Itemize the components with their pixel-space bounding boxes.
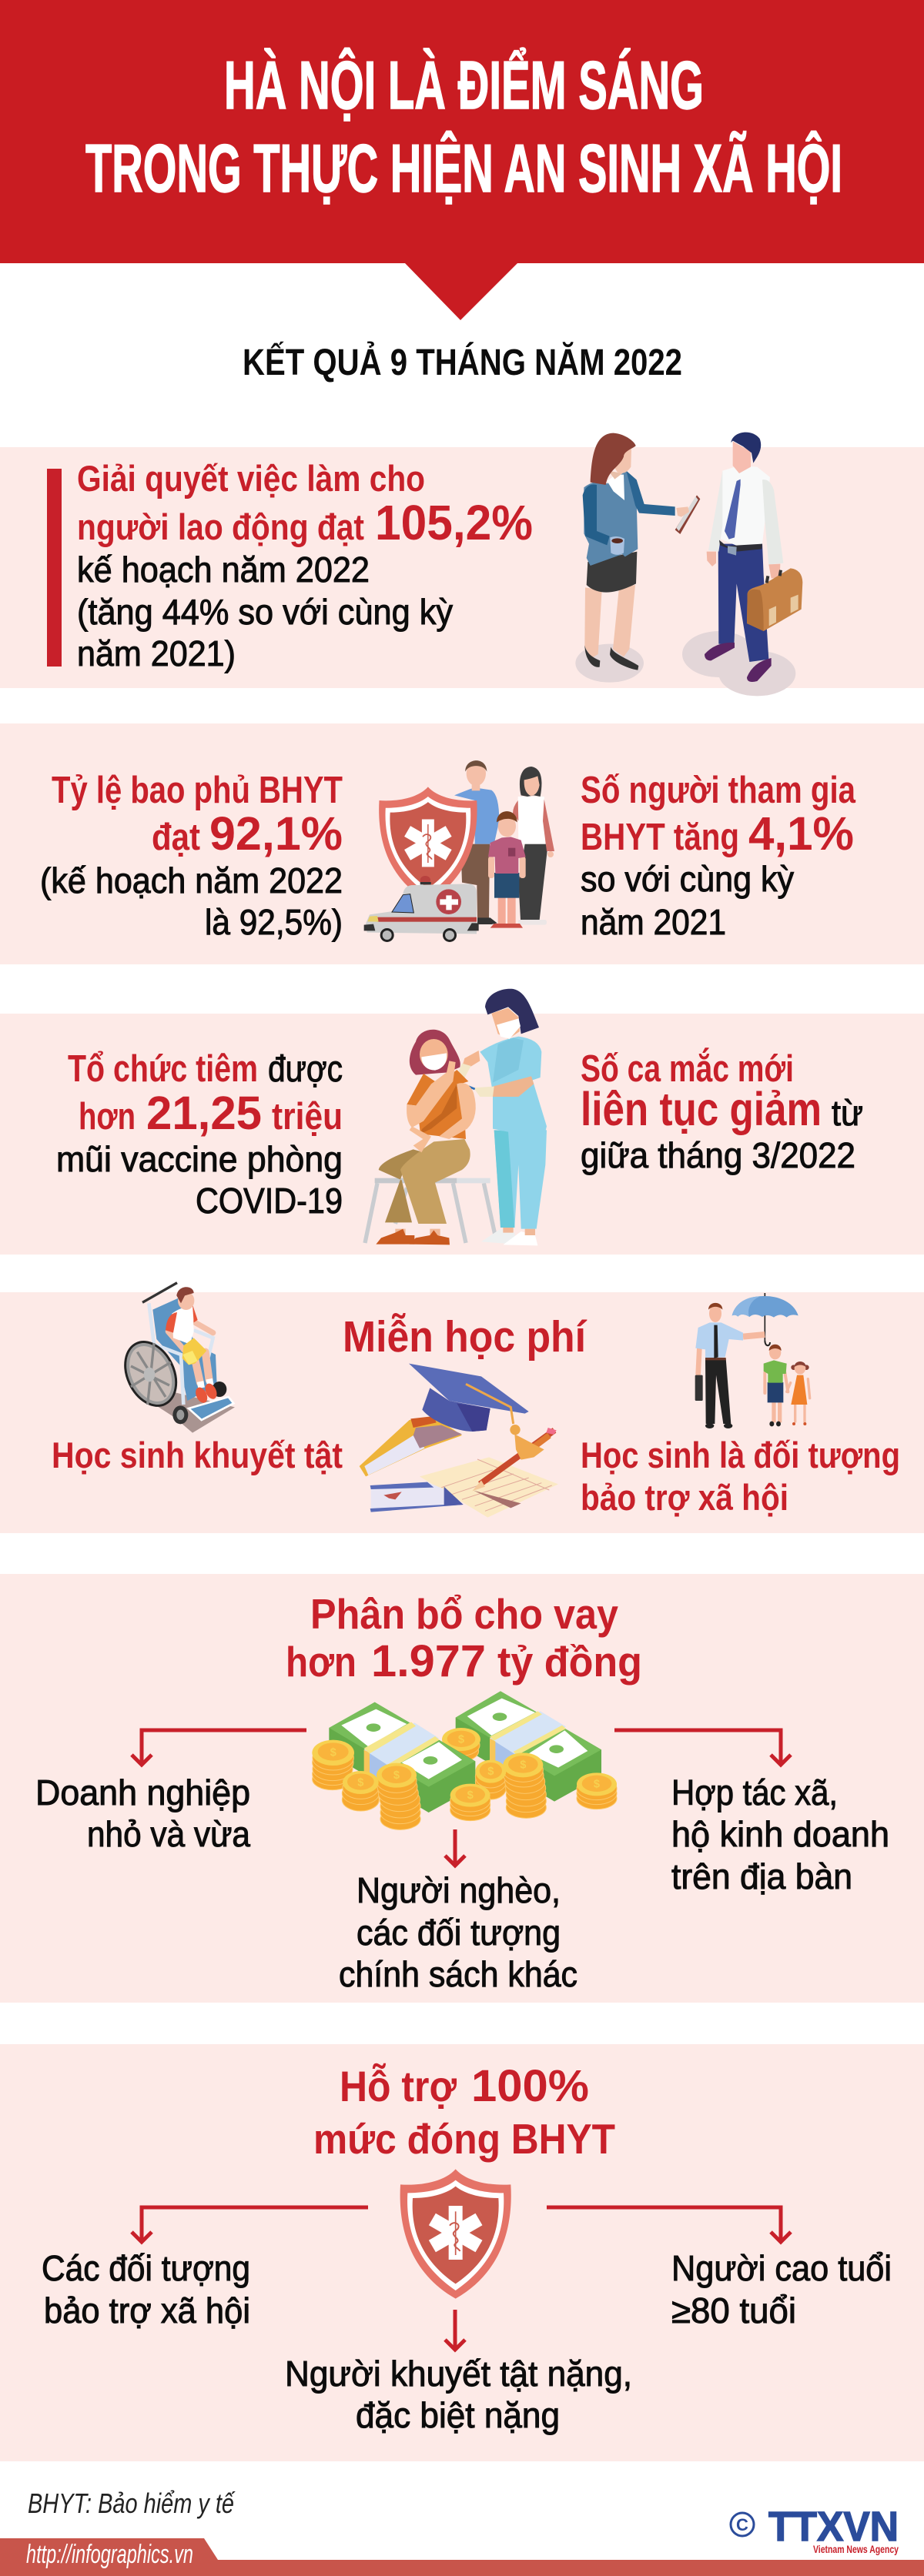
icon: money and coins: $ — [330, 1746, 336, 1759]
text: elderly — [671, 2248, 892, 2330]
text: vaccine doses: Tổ chức tiêm — [68, 1048, 258, 1090]
text: vaccine doses: hơn — [79, 1096, 136, 1138]
panel: tuition exemption — [0, 1283, 924, 1533]
text: social protection students — [581, 1435, 900, 1518]
text: new cases — [581, 1047, 863, 1175]
arrow: left — [132, 2207, 368, 2242]
panel: loan allocation — [0, 1574, 924, 2003]
text: coverage — [40, 770, 343, 942]
text: poor households — [339, 1870, 578, 1994]
subtitle: KẾT QUẢ 9 THÁNG NĂM 2022 — [243, 341, 682, 383]
logo: TTXVN: TTXVN — [768, 2504, 899, 2550]
header banner — [0, 0, 924, 320]
text: new cases: Số ca mắc mới — [581, 1047, 794, 1090]
text: participants: năm 2021 — [581, 902, 726, 942]
icon: money and coins: $ — [594, 1779, 600, 1791]
arrow: right — [614, 1730, 791, 1765]
text: vaccine doses: triệu — [272, 1096, 343, 1138]
footer url: http://infographics.vn — [26, 2540, 193, 2569]
text: employment result: kế hoạch năm 2022 — [77, 550, 370, 590]
heading: health insurance support — [313, 2061, 615, 2163]
text: disabled students: Học sinh khuyết tật — [52, 1435, 343, 1475]
panel: health insurance — [0, 723, 924, 964]
text: participants — [581, 770, 856, 942]
heading: health insurance support: mức đóng BHYT — [313, 2115, 615, 2163]
text: social protection beneficiaries: bảo trợ xã hội — [44, 2290, 250, 2330]
panel: health insurance support — [0, 2044, 924, 2461]
arrow: left — [132, 1730, 306, 1765]
icon: money and coins: $ — [520, 1759, 526, 1772]
footer bar — [0, 2538, 924, 2576]
icon: money and coins: $ — [467, 1789, 474, 1802]
text: participants: BHYT tăng — [581, 817, 739, 858]
text: cooperatives: trên địa bàn — [671, 1856, 852, 1896]
illustration: family, shield and ambulance — [364, 760, 554, 942]
text: new cases: từ — [832, 1093, 863, 1133]
icon: medical shield — [400, 2169, 511, 2299]
text: elderly: Người cao tuổi — [671, 2248, 892, 2288]
text: coverage: 92,1% — [209, 807, 343, 860]
icon: money and coins — [312, 1691, 617, 1829]
text: cooperatives: hộ kinh doanh — [671, 1814, 889, 1854]
heading: loan allocation: Phân bổ cho vay — [310, 1590, 618, 1638]
text: small and medium enterprises — [35, 1772, 250, 1854]
heading: health insurance support: Hỗ trợ — [340, 2062, 457, 2110]
arrow: centre — [445, 2310, 465, 2350]
text: participants: 4,1% — [748, 807, 854, 860]
text: severely disabled — [285, 2354, 632, 2435]
text: vaccine doses: COVID-19 — [196, 1181, 343, 1221]
text: vaccine doses: mũi vaccine phòng — [56, 1139, 343, 1179]
text: coverage: đạt — [152, 817, 200, 858]
text: coverage: (kế hoạch năm 2022 — [40, 860, 343, 900]
text: poor households: chính sách khác — [339, 1954, 578, 1994]
panel: vaccination — [0, 989, 924, 1255]
heading: loan allocation: hơn — [286, 1638, 357, 1686]
logo: TTXVN: C — [736, 2515, 748, 2534]
text: coverage: Tỷ lệ bao phủ BHYT — [52, 770, 343, 811]
icon: man with umbrella and children — [695, 1293, 810, 1428]
heading: health insurance support: 100% — [471, 2061, 589, 2111]
title — [85, 47, 842, 206]
text: employment result: (tăng 44% so với cùng kỳ — [77, 592, 453, 632]
text: employment result: người lao động đạt — [77, 506, 364, 547]
icon: student in wheelchair — [116, 1283, 235, 1433]
accent bar — [47, 469, 62, 667]
text: cooperatives: Hợp tác xã, — [671, 1772, 838, 1813]
text: poor households: các đối tượng — [357, 1913, 561, 1953]
text: severely disabled: Người khuyết tật nặng, — [285, 2354, 632, 2394]
text: social protection beneficiaries — [42, 2248, 250, 2330]
icon: money and coins: $ — [458, 1734, 464, 1746]
text: coverage: là 92,5%) — [205, 902, 343, 942]
text: small and medium enterprises: Doanh nghiệp — [35, 1772, 250, 1813]
text: employment result: Giải quyết việc làm cho — [77, 458, 425, 499]
illustration: nurse vaccinating patient — [365, 989, 547, 1245]
text: elderly: ≥80 tuổi — [671, 2290, 796, 2330]
text: social protection beneficiaries: Các đối tượng — [42, 2248, 250, 2288]
text: cooperatives — [671, 1772, 889, 1896]
text: small and medium enterprises: nhỏ và vừa — [87, 1814, 250, 1854]
arrow: right — [547, 2207, 791, 2242]
text: participants: Số người tham gia — [581, 770, 856, 811]
illustration: two office workers — [575, 433, 802, 696]
icon: money and coins: $ — [487, 1766, 494, 1778]
text: vaccine doses: được — [268, 1049, 343, 1090]
heading: loan allocation — [286, 1590, 642, 1686]
panel: employment — [0, 433, 924, 696]
heading: loan allocation: 1.977 — [371, 1636, 486, 1686]
footnote: BHYT: Bảo hiểm y tế — [28, 2487, 236, 2519]
logo: TTXVN — [731, 2504, 899, 2555]
arrow: centre — [445, 1829, 465, 1866]
icon: money and coins: $ — [357, 1776, 363, 1789]
text: employment result: 105,2% — [375, 495, 533, 550]
icon: graduation cap, books and pencil — [360, 1364, 558, 1518]
text: severely disabled: đặc biệt nặng — [356, 2395, 560, 2435]
text: vaccine doses — [56, 1048, 343, 1221]
heading: tuition exemption: Miễn học phí — [343, 1312, 588, 1362]
text: new cases: giữa tháng 3/2022 — [581, 1135, 855, 1175]
text: employment result — [77, 458, 533, 673]
text: poor households: Người nghèo, — [357, 1870, 561, 1910]
text: vaccine doses: 21,25 — [146, 1087, 262, 1139]
text: new cases: liên tục giảm — [581, 1083, 822, 1135]
heading: loan allocation: tỷ đồng — [497, 1638, 642, 1686]
text: social protection students: bảo trợ xã hội — [581, 1477, 788, 1518]
text: participants: so với cùng kỳ — [581, 859, 794, 899]
text: employment result: năm 2021) — [77, 633, 236, 673]
icon: money and coins: $ — [393, 1769, 400, 1782]
